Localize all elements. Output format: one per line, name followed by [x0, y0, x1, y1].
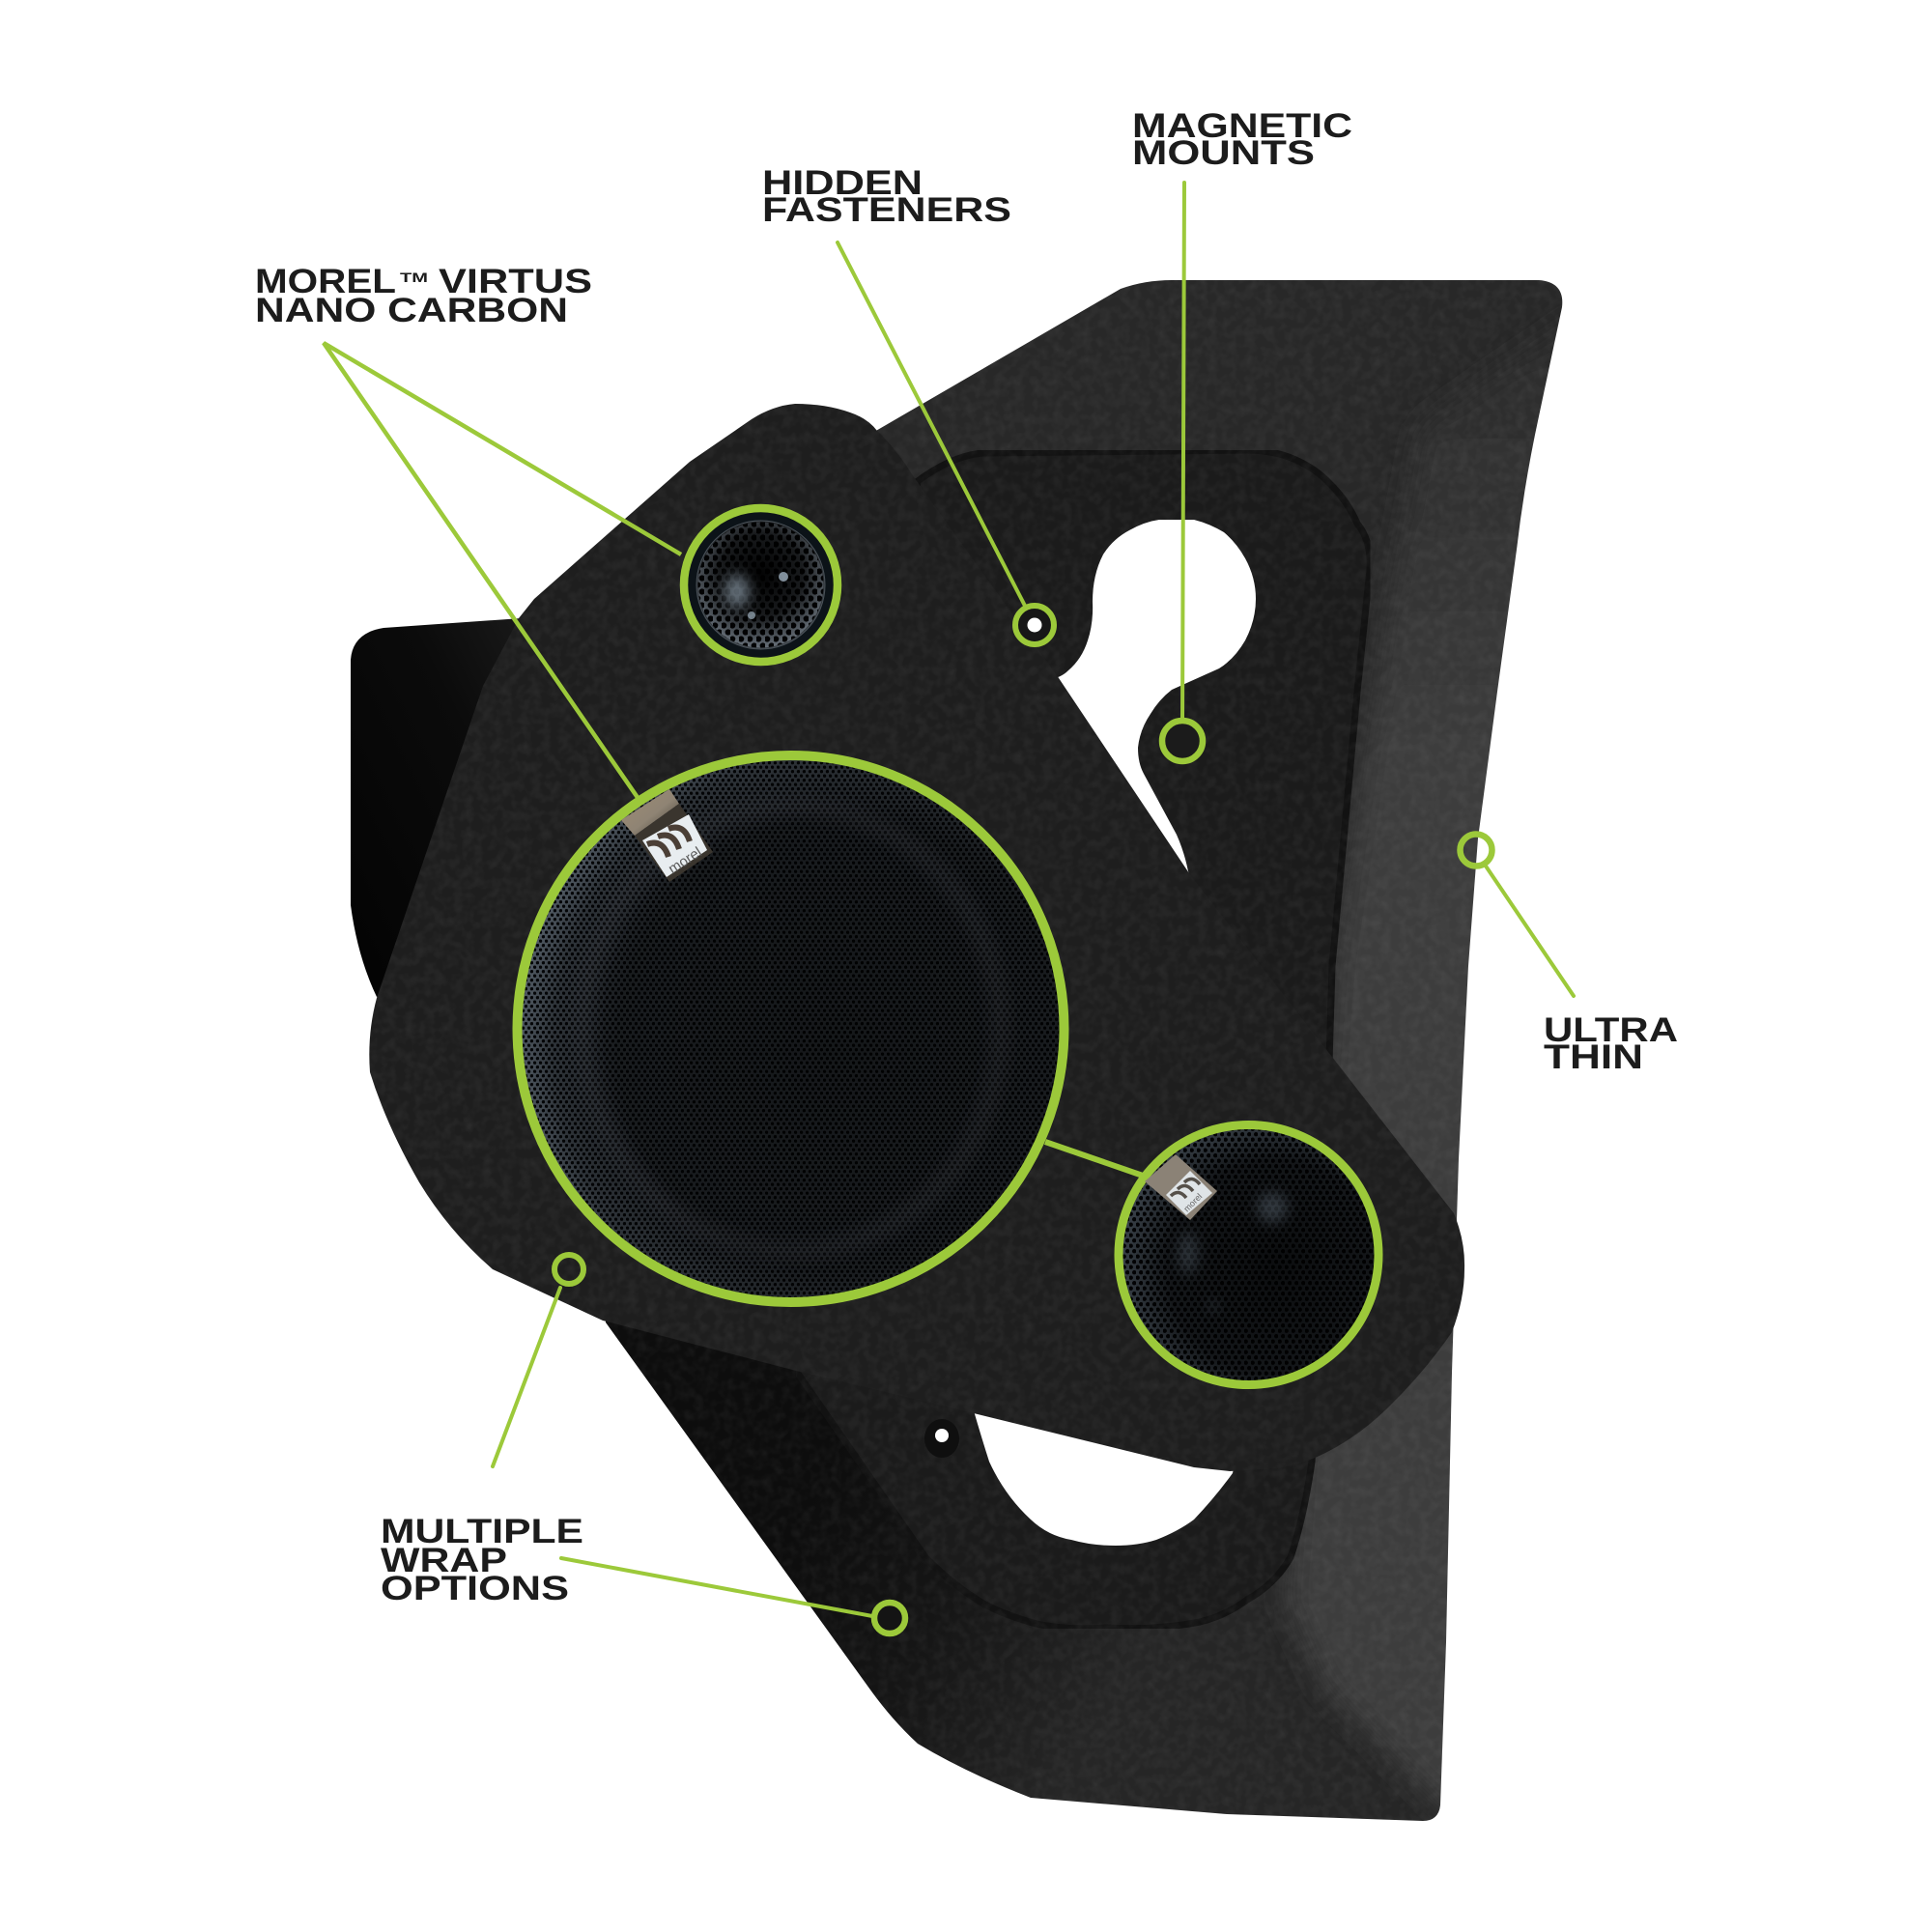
- label: hidden fasteners: HIDDEN: [762, 164, 923, 202]
- label: magnetic mounts: MAGNETIC: [1132, 107, 1352, 145]
- morel badge on secondary driver: [1145, 1154, 1217, 1220]
- label: magnetic mounts: [1132, 107, 1352, 172]
- leader line: fasteners: [838, 242, 1026, 608]
- lower keyhole cutout: [971, 1401, 1241, 1546]
- label: ultra thin: [1544, 1011, 1678, 1076]
- leader line: rear wrap: [561, 1558, 872, 1616]
- connector between woofer and driver: [1045, 1142, 1146, 1177]
- callout: magnetic mounts: [1132, 107, 1352, 761]
- morel badge on woofer: morel: [666, 844, 705, 877]
- callout: multiple wrap options: [381, 1255, 905, 1634]
- tweeter: [684, 508, 838, 662]
- label: multiple wrap options: [381, 1513, 583, 1607]
- morel badge on woofer: [621, 789, 713, 882]
- callout: ultra thin: [1461, 835, 1678, 1076]
- leader line: front wrap: [493, 1288, 560, 1466]
- leader lines to tweeter and woofer: [324, 343, 681, 799]
- label: ultra thin: THIN: [1544, 1038, 1643, 1076]
- leader line: thin edge: [1485, 865, 1574, 996]
- tweeter highlights: [724, 572, 788, 619]
- label: morel virtus: VIRTUS: [439, 263, 592, 300]
- marker: rear wrap ring: [874, 1603, 905, 1634]
- rear mounting panel: [570, 270, 1584, 1835]
- label: hidden fasteners: [762, 164, 1011, 229]
- rear left wing of mount: [351, 618, 541, 997]
- woofer green ring: [518, 755, 1065, 1302]
- lower fastener hole: [924, 1419, 959, 1458]
- front speaker baffle: [369, 404, 1464, 1471]
- label: morel virtus: [255, 263, 592, 329]
- label: multiple wrap options: OPTIONS: [381, 1570, 569, 1607]
- marker: edge ring: [1461, 835, 1492, 866]
- label: ultra thin: ULTRA: [1544, 1011, 1678, 1049]
- recess in rear panel: [796, 450, 1370, 1629]
- tweeter green ring: [684, 508, 838, 662]
- callout: morel virtus: [255, 263, 681, 799]
- marker: magnet ring: [1162, 721, 1203, 761]
- label: magnetic mounts: MOUNTS: [1132, 134, 1315, 172]
- morel badge on secondary driver: morel: [1181, 1191, 1204, 1213]
- driver green ring: [1119, 1124, 1378, 1385]
- driver highlights: [1179, 1192, 1288, 1311]
- label: multiple wrap options: MULTIPLE: [381, 1513, 583, 1550]
- leader line: magnets: [1182, 183, 1184, 721]
- woofer cone sheen: [584, 807, 1000, 1251]
- secondary mid-range driver: [1119, 1124, 1378, 1385]
- callout: hidden fasteners: [762, 164, 1054, 644]
- marker: front wrap ring: [554, 1255, 583, 1284]
- main mid-woofer: [518, 755, 1065, 1302]
- marker: fastener ring: [1015, 606, 1054, 644]
- label: multiple wrap options: WRAP: [381, 1542, 507, 1579]
- label: morel virtus: NANO CARBON: [255, 292, 568, 329]
- label: morel virtus: MOREL: [255, 263, 396, 300]
- label: hidden fasteners: FASTENERS: [762, 191, 1011, 229]
- label: morel virtus: TM: [400, 270, 428, 285]
- upper keyhole cutout: [1024, 520, 1256, 898]
